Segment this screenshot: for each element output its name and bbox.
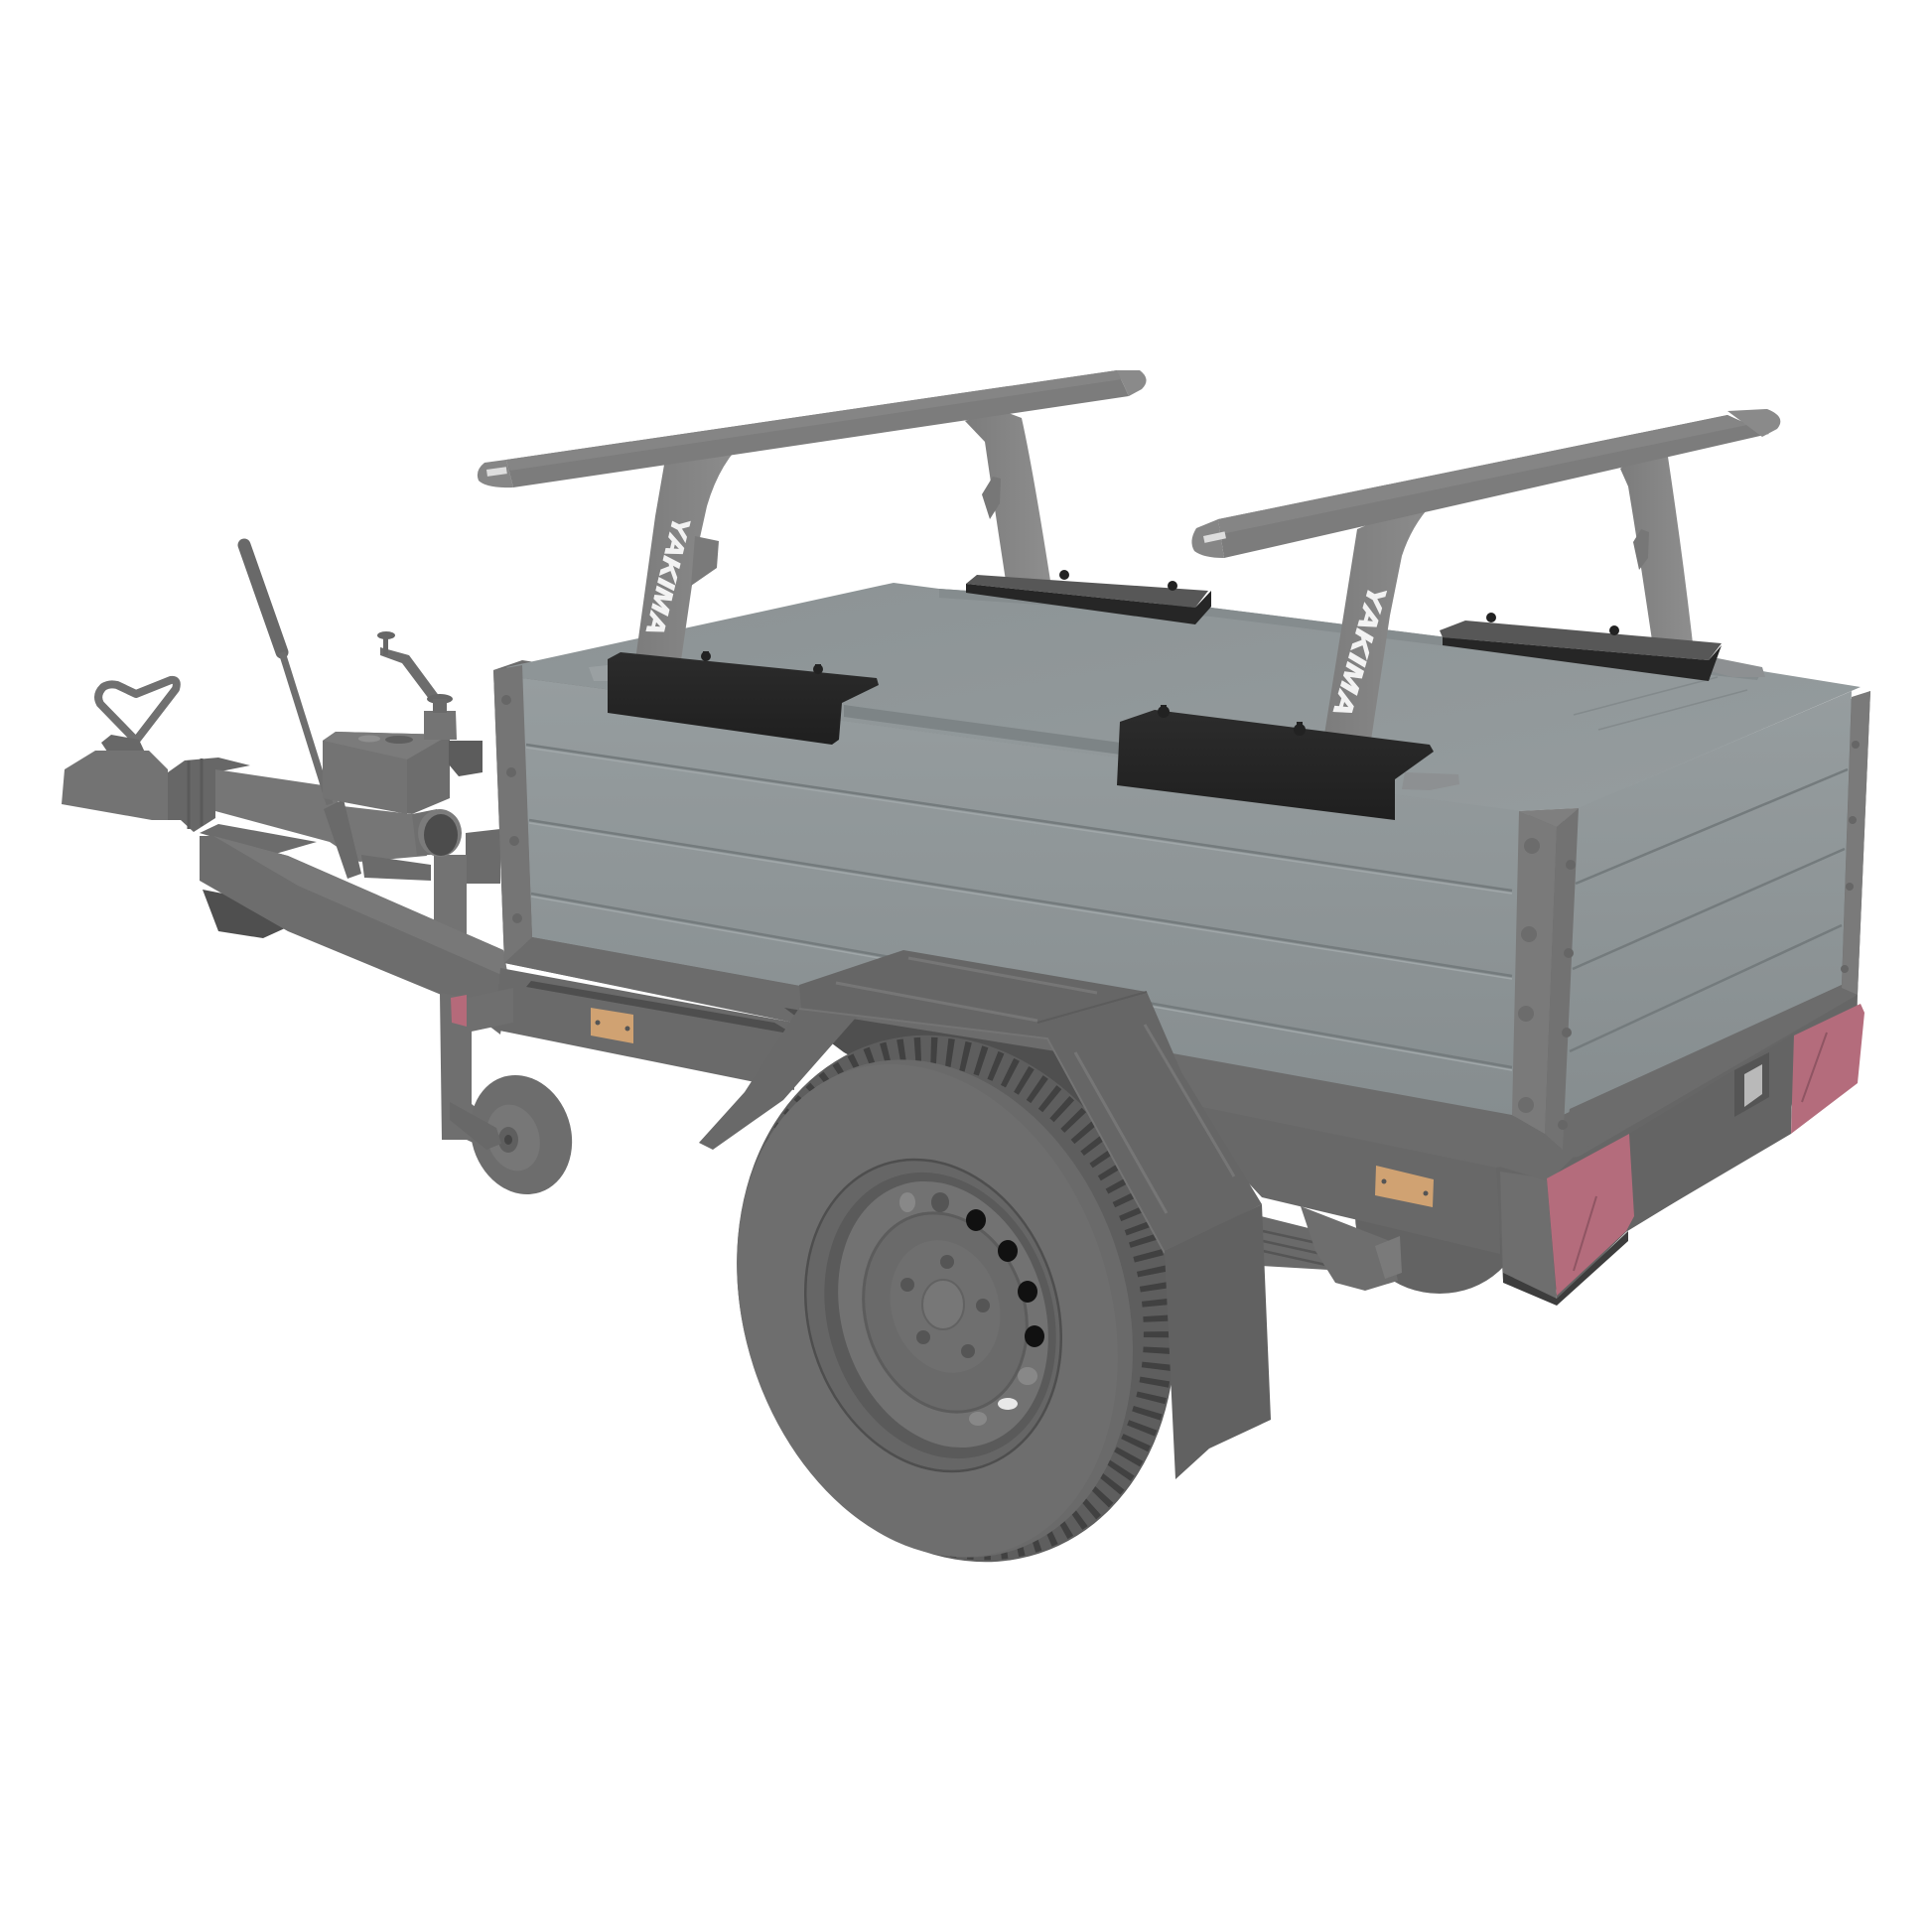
plank seams side <box>526 745 1512 891</box>
fender ridges <box>836 958 1234 1213</box>
brake lever <box>244 545 361 879</box>
fender body <box>799 950 1262 1253</box>
jockey wheel <box>440 993 587 1207</box>
leg knob <box>691 536 719 586</box>
far mount <box>1440 613 1722 681</box>
crossbar two <box>1191 409 1780 558</box>
tread blocks <box>692 999 1220 1598</box>
bellows <box>168 758 250 832</box>
hub cap <box>922 1280 964 1329</box>
wheel bolts <box>900 1255 990 1358</box>
tail light right <box>1791 1004 1864 1134</box>
lower band <box>504 937 1858 1181</box>
rail shadow groove <box>526 981 794 1035</box>
rail end bracket <box>1710 657 1765 677</box>
main wheel <box>670 978 1242 1619</box>
rim holes <box>899 1192 1044 1426</box>
side marker rear <box>1375 1166 1434 1207</box>
far leg knob <box>1633 529 1649 570</box>
left corner post <box>493 665 532 963</box>
lid corner bracket <box>589 665 608 681</box>
fender inner flap <box>699 1008 857 1150</box>
chassis side rail rear <box>1191 1092 1500 1254</box>
fender <box>699 950 1262 1253</box>
tail light left <box>1547 1134 1634 1296</box>
wheel arch shadow <box>784 1008 1162 1241</box>
leaf spring and shackle <box>1261 1206 1402 1291</box>
number plate lamp <box>1734 1052 1769 1117</box>
handle base <box>101 735 146 755</box>
near leg <box>635 438 748 660</box>
front reflector bracket <box>451 988 513 1033</box>
far mount <box>966 570 1211 624</box>
rack one, near leg and mount <box>608 438 879 745</box>
A-frame drawbar <box>200 836 508 1035</box>
far leg knob <box>982 477 1001 519</box>
tyre tread <box>670 978 1242 1619</box>
near mount <box>608 651 879 745</box>
crossbar one <box>478 370 1147 487</box>
rack one, far leg and mount <box>965 409 1211 624</box>
cargo box <box>493 583 1870 1181</box>
rear support arm <box>466 829 500 884</box>
sidewall <box>676 1015 1178 1606</box>
mud flap <box>1165 1204 1271 1479</box>
jack handle <box>377 631 457 740</box>
lower mount plate <box>200 824 317 855</box>
shoulder <box>675 1008 1195 1609</box>
rear right post <box>1841 691 1870 995</box>
side marker front <box>591 1008 633 1043</box>
drawbar cylinder <box>215 769 427 862</box>
underside rear chassis <box>1496 988 1858 1301</box>
rack two, near leg and mount <box>1117 491 1459 820</box>
far leg <box>965 409 1050 581</box>
tube opening <box>412 809 462 857</box>
drawbar upper face <box>213 836 508 978</box>
rack two, far leg and mount <box>1440 452 1765 681</box>
right side panel <box>1559 691 1852 1117</box>
left side panel <box>522 678 1529 1118</box>
top groove <box>844 705 1390 791</box>
rim inner ring <box>788 1142 1092 1489</box>
hitch handle loop <box>98 680 177 741</box>
rim outer ring <box>766 1126 1100 1505</box>
chassis side rail front <box>494 968 794 1090</box>
coupler head <box>62 751 168 820</box>
logo: YAKIMA <box>1327 582 1393 720</box>
brake housing box <box>323 732 450 814</box>
tow hitch assembly <box>62 545 500 939</box>
rail end bracket <box>1402 772 1459 790</box>
vertical post <box>434 855 467 939</box>
left post rivets <box>501 695 522 923</box>
hidden far wheel <box>1355 1139 1524 1294</box>
lid <box>506 583 1861 811</box>
rear support foot <box>203 890 285 938</box>
rear bumper box <box>1500 1035 1793 1306</box>
near mount <box>1117 705 1434 820</box>
lid rear rim <box>939 589 1762 680</box>
plank seams rear <box>1570 769 1848 1051</box>
support arm behind <box>361 855 431 881</box>
rim centre plate <box>838 1191 1052 1434</box>
box base <box>493 660 1870 1168</box>
lid seams <box>1574 677 1747 730</box>
rim dish <box>805 1154 1081 1475</box>
logo: YAKIMA <box>640 514 695 638</box>
front corner post <box>1512 808 1579 1150</box>
hub <box>874 1226 1017 1387</box>
far leg <box>1620 452 1693 643</box>
bracket <box>449 741 483 776</box>
near leg <box>1322 491 1446 747</box>
